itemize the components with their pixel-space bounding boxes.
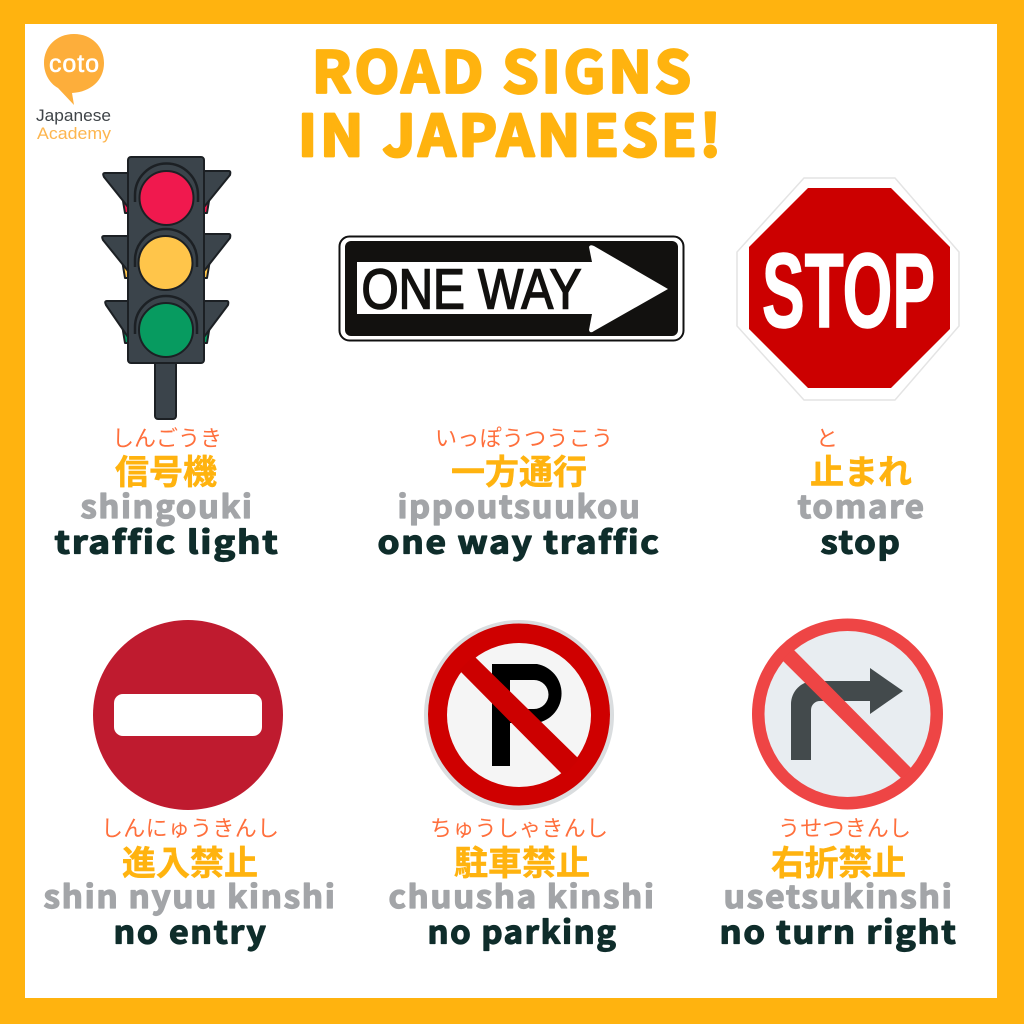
label: no entry: 進入禁止 <box>122 836 258 885</box>
label: traffic light: しんごうき <box>112 421 222 453</box>
label: no entry <box>44 811 336 954</box>
icon: one way sign: ONE WAY <box>362 258 582 322</box>
logo: coto Japanese Academy: coto <box>49 50 99 78</box>
label: one way traffic: one way traffic <box>378 518 660 564</box>
label: stop: 止まれ <box>810 445 912 494</box>
icon: stop sign <box>737 178 959 400</box>
label: no parking <box>388 811 656 954</box>
label: no turn right: no turn right <box>720 908 958 954</box>
label: one way traffic: 一方通行 <box>451 445 587 494</box>
label: no entry: no entry <box>114 908 268 954</box>
label: traffic light <box>54 421 280 564</box>
logo: coto Japanese Academy: Japanese <box>36 106 111 125</box>
logo: coto Japanese Academy: Academy <box>37 124 112 143</box>
label: no turn right: usetsukinshi <box>724 872 954 918</box>
label: one way traffic: ippoutsuukou <box>398 482 642 528</box>
label: traffic light: traffic light <box>54 518 280 564</box>
label: no entry: しんにゅうきんし <box>101 811 279 843</box>
label: traffic light: 信号機 <box>115 445 217 494</box>
icon: traffic light <box>102 157 230 419</box>
label: one way traffic: いっぽうつうこう <box>435 421 613 453</box>
icon: no right turn sign <box>752 618 943 810</box>
icon: no parking sign <box>424 620 614 810</box>
label: traffic light: shingouki <box>80 482 253 528</box>
label: no turn right <box>720 811 958 954</box>
icon: one way sign <box>340 236 684 340</box>
label: no turn right: うせつきんし <box>778 811 911 843</box>
label: stop: tomare <box>798 482 926 528</box>
icon: no entry sign <box>93 620 283 810</box>
title: ROAD SIGNS <box>312 28 694 110</box>
label: no parking: 駐車禁止 <box>454 836 590 885</box>
label: no parking: no parking <box>428 908 618 954</box>
logo: coto Japanese Academy <box>36 34 112 143</box>
label: stop: と <box>816 421 838 453</box>
title <box>298 28 724 173</box>
label: one way traffic <box>378 421 660 564</box>
label: no turn right: 右折禁止 <box>771 836 906 885</box>
title: IN JAPANESE! <box>298 91 724 173</box>
label: stop <box>798 421 926 564</box>
label: no parking: ちゅうしゃきんし <box>430 811 608 843</box>
label: stop: stop <box>820 518 902 564</box>
label: no parking: chuusha kinshi <box>388 872 656 918</box>
label: no entry: shin nyuu kinshi <box>44 872 336 918</box>
